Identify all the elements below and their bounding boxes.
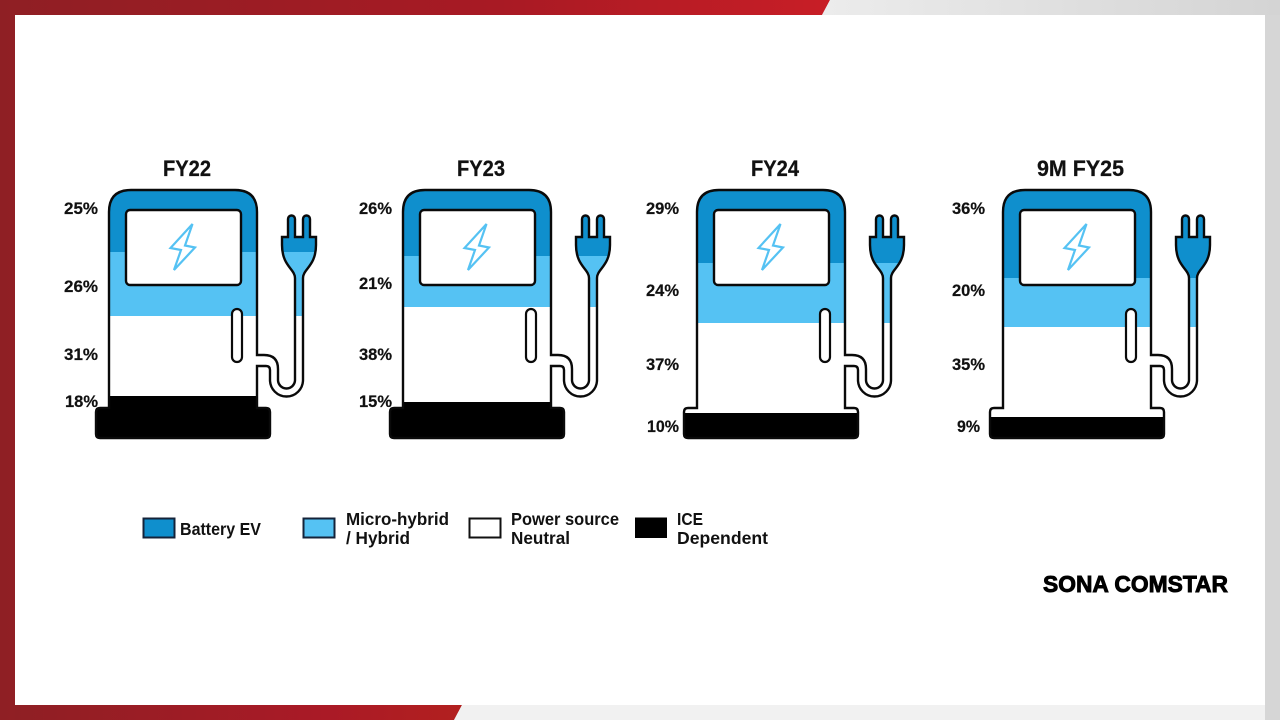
- value: Battery EV 25%: 25%: [64, 199, 98, 218]
- legend item: Battery EV: [144, 518, 261, 539]
- heading: 9M FY25: 9M FY25: [1037, 156, 1124, 181]
- panel: FY24 pump: [646, 156, 913, 442]
- legend item: ICE Dependent: ICE: [677, 509, 703, 529]
- legend: [144, 509, 768, 548]
- pump graphic: [678, 185, 913, 442]
- value: Battery EV 29%: 29%: [646, 199, 679, 218]
- pump screen: [126, 210, 241, 285]
- panel: FY23 pump: [359, 156, 619, 442]
- heading: FY23: FY23: [457, 156, 505, 181]
- legend item: Power source Neutral: [470, 509, 619, 548]
- panel: FY22 pump: [64, 156, 325, 442]
- heading: FY22: FY22: [163, 156, 211, 181]
- legend item: ICE Dependent: [635, 509, 768, 548]
- pump graphic: [984, 185, 1219, 442]
- value: ICE 10%: 10%: [647, 417, 679, 436]
- value: Battery EV 26%: 26%: [359, 199, 392, 218]
- legend item: Power source Neutral: Power source: [511, 509, 619, 529]
- value: Neutral 35%: 35%: [952, 355, 985, 374]
- pump slot: [232, 309, 242, 362]
- legend item: Battery EV: Battery EV: [180, 519, 261, 539]
- value: Battery EV 36%: 36%: [952, 199, 985, 218]
- value: Hybrid 26%: 26%: [64, 277, 98, 296]
- heading: FY24: FY24: [751, 156, 800, 181]
- legend item: ICE Dependent: Dependent: [677, 528, 768, 548]
- value: Neutral 37%: 37%: [646, 355, 679, 374]
- value: Hybrid 21%: 21%: [359, 274, 392, 293]
- legend item: Power source Neutral: Neutral: [511, 528, 570, 548]
- icon: lightning bolt: [170, 224, 195, 270]
- value: Hybrid 20%: 20%: [952, 281, 985, 300]
- panel: 9M FY25 pump: [952, 156, 1219, 442]
- value: Hybrid 24%: 24%: [646, 281, 679, 300]
- pump fill levels: [97, 191, 315, 437]
- pump graphic: [384, 185, 619, 442]
- legend item: Micro-hybrid / Hybrid: Micro-hybrid: [346, 509, 449, 529]
- logo: Sona Comstar: SONA COMSTAR: [1043, 571, 1228, 597]
- value: ICE 9%: 9%: [957, 417, 980, 436]
- pump outline: [96, 190, 316, 438]
- value: Neutral 38%: 38%: [359, 345, 392, 364]
- value: ICE 15%: 15%: [359, 392, 392, 411]
- legend item: Micro-hybrid / Hybrid: [304, 509, 449, 548]
- value: ICE 18%: 18%: [65, 392, 98, 411]
- value: Neutral 31%: 31%: [64, 345, 98, 364]
- legend item: Micro-hybrid / Hybrid: / Hybrid: [346, 528, 410, 548]
